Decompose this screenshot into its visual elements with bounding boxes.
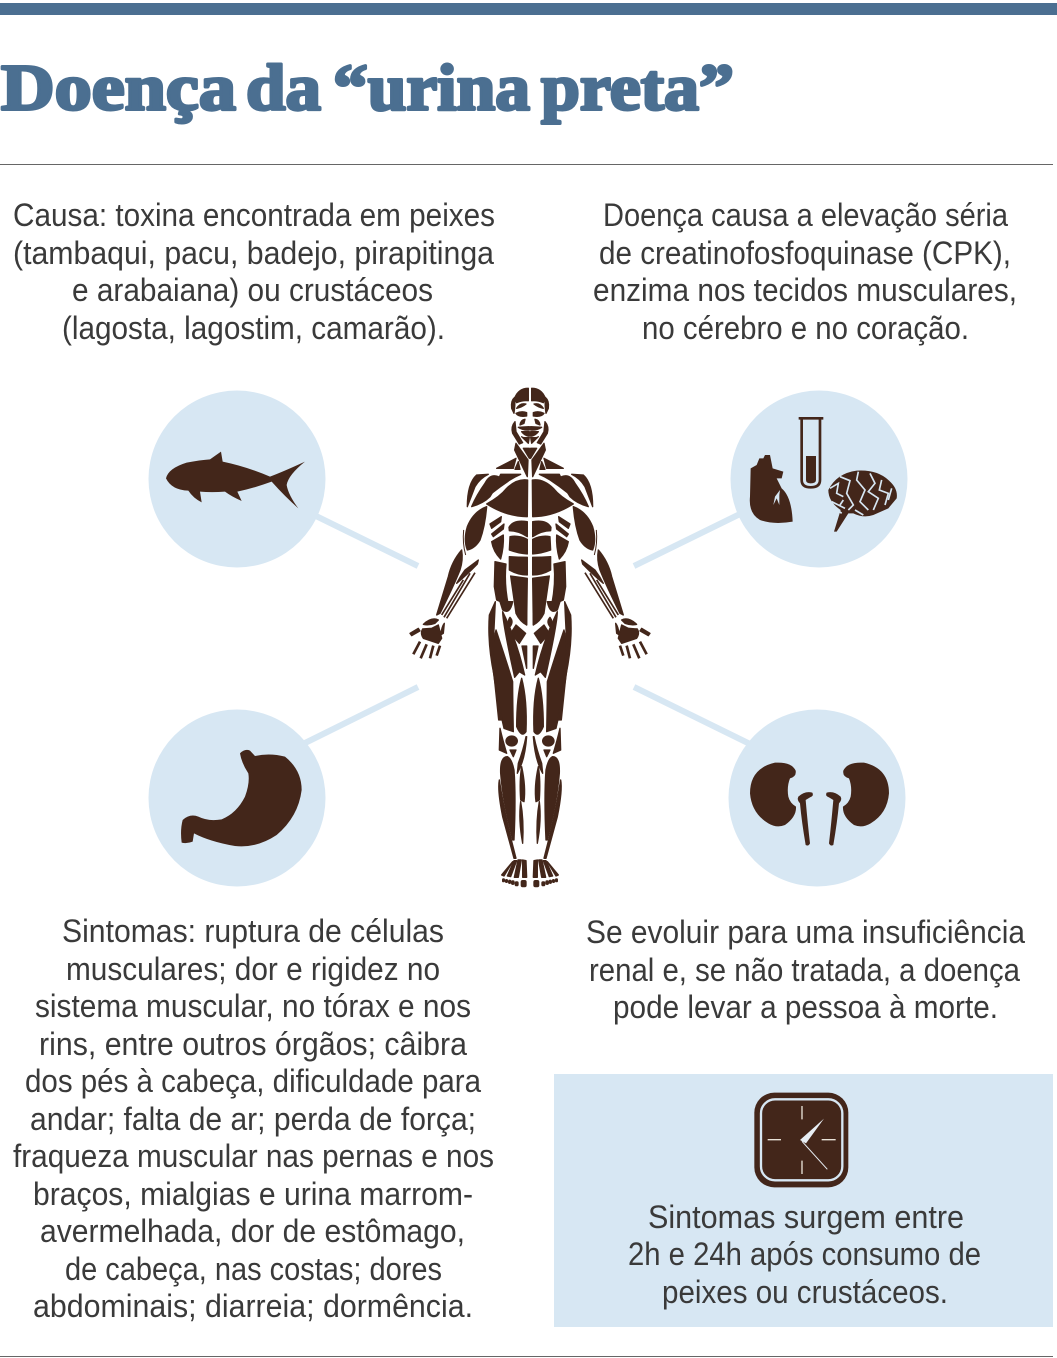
panel: organs circle [730, 390, 908, 568]
text block: cause: e arabaiana) ou crustáceos [72, 272, 433, 308]
icon: clock [754, 1093, 848, 1187]
text block: symptoms: sistema muscular, no tórax e nos [35, 988, 471, 1024]
title: Doença [1, 52, 236, 124]
text block: symptoms: abdominais; diarreia; dormência. [33, 1288, 473, 1324]
title [1, 52, 734, 124]
panel: onset callout [554, 1074, 1053, 1327]
icon: brain [828, 471, 897, 532]
text block: symptoms: rins, entre outros órgãos; câibra [39, 1026, 467, 1062]
title: “urina [333, 52, 530, 124]
text block: cause: (tambaqui, pacu, badejo, pirapitinga [13, 235, 494, 271]
text block: symptoms: de cabeça, nas costas; dores [65, 1251, 442, 1287]
text block: symptoms: fraqueza muscular nas pernas e nos [13, 1138, 494, 1174]
panel: fish circle [148, 390, 326, 568]
text block: kidney failure: pode levar a pessoa à morte. [613, 989, 998, 1025]
text block: CPK elevation [593, 197, 1017, 346]
icon: fish [166, 452, 305, 508]
text block: symptoms: braços, mialgias e urina marrom- [33, 1176, 473, 1212]
text block: kidney failure: Se evoluir para uma insuficiência [586, 914, 1025, 950]
title: preta” [541, 52, 734, 124]
panel: kidneys circle [728, 710, 906, 886]
text block: CPK elevation: de creatinofosfoquinase (CPK), [599, 235, 1011, 271]
connector lines [303, 514, 750, 744]
text block: kidney failure: renal e, se não tratada, a doença [589, 952, 1020, 988]
text block: symptoms: Sintomas: ruptura de células [62, 913, 444, 949]
text block: cause [13, 197, 495, 346]
text block: symptoms: dos pés à cabeça, dificuldade para [25, 1063, 481, 1099]
text block: symptoms: andar; falta de ar; perda de força; [30, 1101, 476, 1137]
panel: stomach circle [148, 710, 326, 886]
text block: symptoms [13, 913, 494, 1324]
text block: CPK elevation: no cérebro e no coração. [642, 310, 969, 346]
top banner bar [0, 3, 1057, 15]
callout text: Sintomas surgem entre [648, 1199, 964, 1235]
illustration: human muscular body [410, 388, 650, 887]
text block: cause: (lagosta, lagostim, camarão). [62, 310, 445, 346]
callout text: peixes ou crustáceos. [662, 1274, 948, 1310]
icons: heart, test tube [750, 418, 823, 523]
text block: cause: Causa: toxina encontrada em peixes [13, 197, 495, 233]
text block: symptoms: musculares; dor e rigidez no [66, 951, 440, 987]
title: da [246, 52, 321, 124]
text block: CPK elevation: enzima nos tecidos musculares, [593, 272, 1017, 308]
header divider [0, 164, 1053, 165]
text block: symptoms: avermelhada, dor de estômago, [40, 1213, 465, 1249]
text block: CPK elevation: Doença causa a elevação séria [603, 197, 1008, 233]
text block: kidney failure [586, 914, 1025, 1025]
bottom rule [0, 1356, 1053, 1357]
callout text [628, 1199, 981, 1310]
callout text: 2h e 24h após consumo de [628, 1236, 981, 1272]
icon: stomach [181, 750, 302, 846]
icon: kidneys [750, 763, 889, 846]
